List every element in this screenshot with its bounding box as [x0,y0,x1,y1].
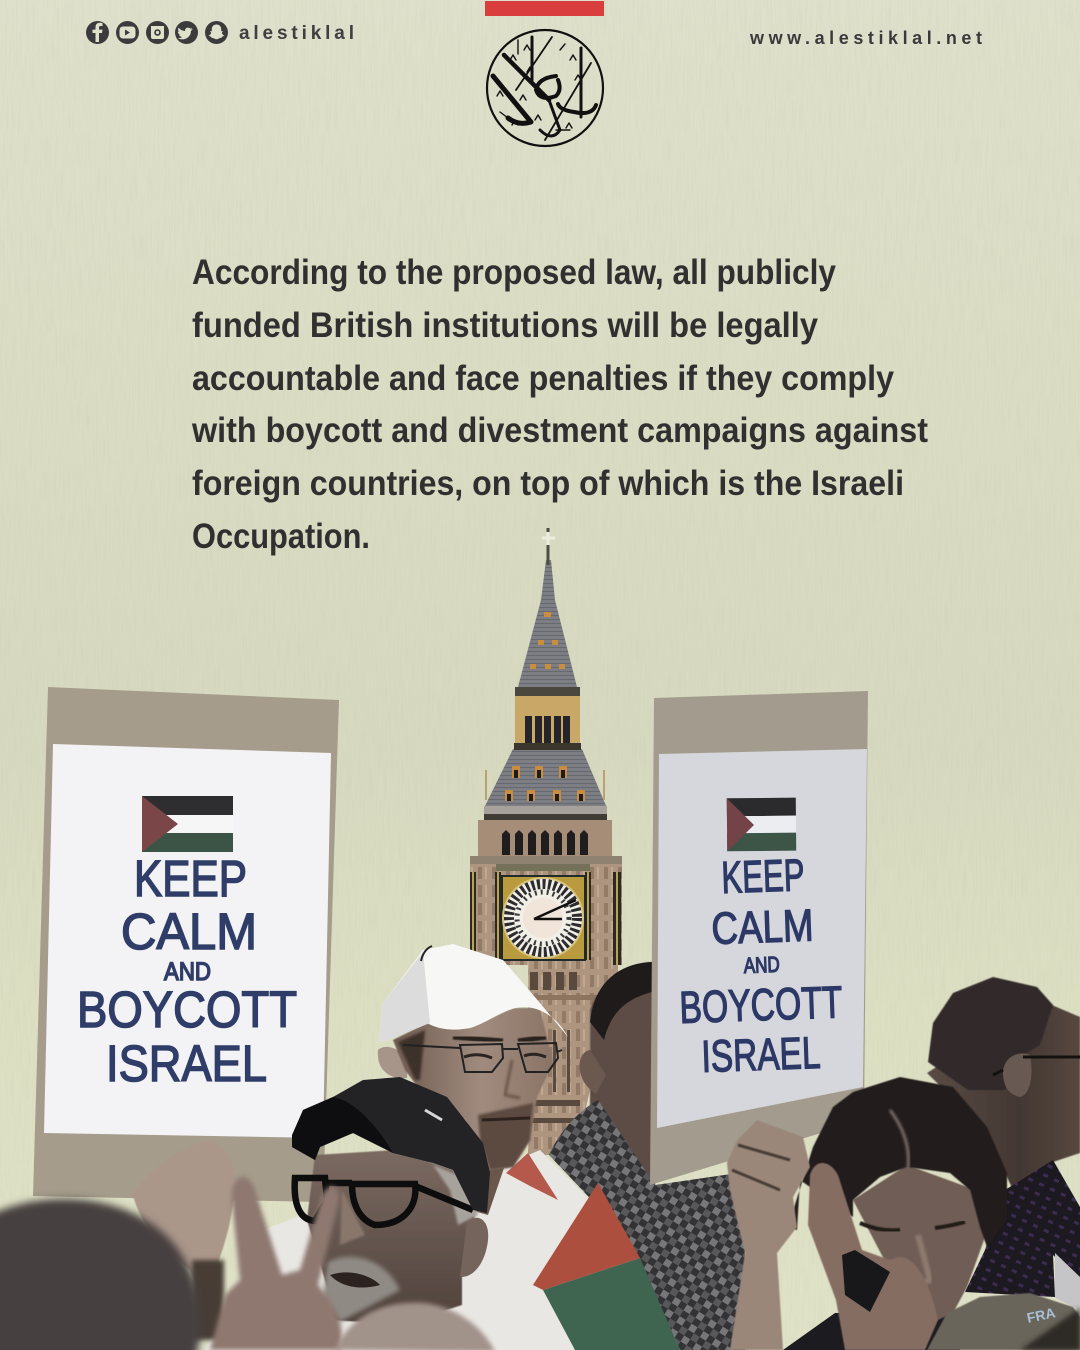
protest sign right [650,691,868,1185]
dark scarf [965,1160,1080,1297]
slogan: ISRAEL [106,1035,267,1092]
social icons [86,21,228,44]
dark jacket [783,1310,960,1350]
ear [460,1218,488,1277]
balustrade [470,856,622,871]
hair [788,1077,1007,1247]
face [393,1008,553,1170]
phone [842,1250,890,1312]
eyes [860,1222,965,1230]
black baseball cap [292,1077,490,1213]
body paragraph: Occupation. [192,517,370,556]
body paragraph [191,253,928,556]
peace sign hand [210,1177,342,1350]
neck and face [927,1000,1080,1190]
phone hand [808,1163,938,1350]
wire glasses [403,1043,562,1072]
slogan: AND [743,952,780,978]
sideburn [398,1030,425,1080]
checkered keffiyeh [549,1100,745,1350]
icon: instagram [146,21,169,44]
ear [579,1050,606,1094]
mouth [330,1272,380,1288]
slogan: KEEP [721,849,805,903]
icon: youtube [116,21,139,44]
body paragraph: accountable and face penalties if they comply [192,359,894,398]
nose [340,1190,365,1245]
hand holding right sign [727,1120,810,1350]
arm in dark [192,1260,224,1340]
lower roof [484,749,607,820]
hair parting [890,1110,908,1168]
slogan: ISRAEL [701,1027,821,1082]
white cap man [205,944,680,1350]
slogan: BOYCOTT [679,976,843,1033]
face [853,1165,985,1325]
social handle: alestiklal [239,23,354,44]
white poster [657,749,867,1128]
hand holding left sign [133,1142,235,1300]
slogan: CALM [711,899,814,954]
lower shaft [528,960,618,1155]
big ben clock tower [470,528,622,1155]
ear [378,1047,408,1078]
logo: round calligraphic emblem [487,30,603,146]
palestinian flag [142,796,233,852]
cardboard backing [33,687,339,1202]
hair [590,962,652,1040]
slogan: AND [164,958,211,986]
thick glasses [295,1178,473,1225]
flag shoulder green [543,1258,680,1350]
clock stage [470,857,622,965]
cardboard backing [650,691,868,1185]
glasses arm [993,1057,1080,1075]
blurred bald head foreground [335,1303,495,1350]
grey temple hair [433,1165,478,1225]
neck [470,1150,505,1215]
white poster [44,744,331,1138]
face [307,1150,475,1325]
body paragraph: According to the proposed law, all publicly [192,253,836,292]
arcade stage [478,820,612,858]
cap bottom right [927,1293,1080,1350]
nose [915,1235,930,1285]
right-back man [927,977,1080,1310]
light shirt patch [1055,1253,1080,1310]
clock face [502,876,585,960]
nose shadow [505,1060,520,1098]
flag collar red [506,1153,558,1200]
slogan: KEEP [134,850,247,907]
eyebrows [453,1037,546,1041]
eyes [464,1054,546,1058]
slogan [679,849,843,1082]
protest sign left [33,687,339,1202]
body paragraph: with boycott and divestment campaigns against [191,411,928,450]
hair man [783,1077,1007,1350]
body paragraph: funded British institutions will be legally [192,306,818,345]
black cap man [292,1077,490,1325]
icon: facebook [86,21,109,44]
white shirts [205,1150,680,1350]
belfry windows [502,830,588,855]
hair [928,977,1053,1090]
red top bar [485,1,604,16]
slogan [77,850,297,1092]
white cap [378,944,568,1043]
website url: www.alestiklal.net [749,28,982,48]
spire [518,560,577,687]
icon: twitter [175,21,198,44]
scarf man [549,962,745,1350]
face [590,962,655,1190]
slogan: CALM [121,903,257,960]
lantern [515,690,580,750]
cap lettering: FRA [1025,1304,1057,1326]
blurred corner foreground [1020,1308,1080,1350]
icon: snapchat [205,21,228,44]
palestinian flag [727,798,796,851]
slogan: BOYCOTT [77,981,297,1038]
ear [1003,1053,1032,1097]
flag shoulder red [533,1183,640,1290]
small pinnacles [486,770,604,800]
gold and dark side strips [470,872,621,965]
blurred head foreground left [0,1199,201,1350]
beard [478,1103,533,1170]
body paragraph: foreign countries, on top of which is the Israeli [192,464,904,503]
grey moustache and goatee [322,1257,400,1322]
